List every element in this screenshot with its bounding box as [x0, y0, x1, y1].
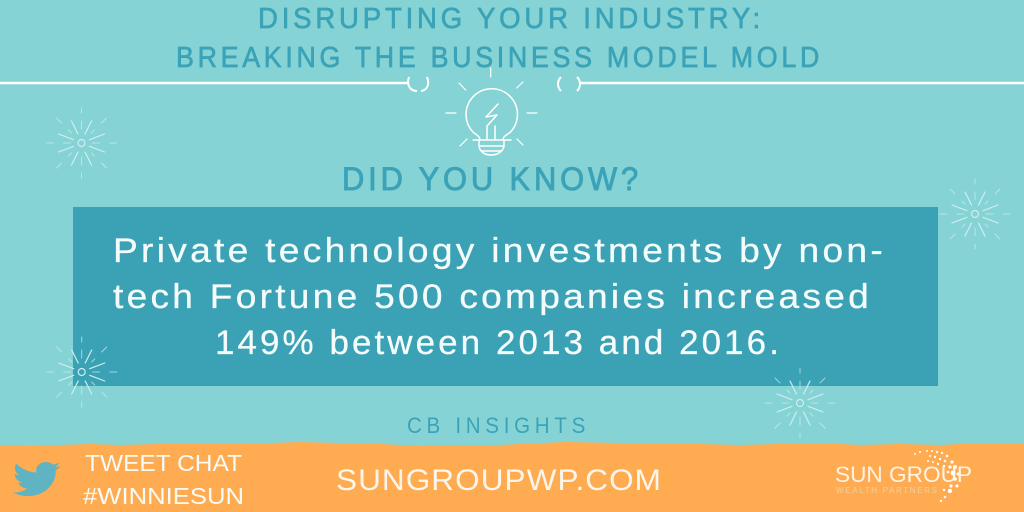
icon: starburst left upper — [46, 108, 116, 178]
tweet chat text: TWEET CHAT — [85, 450, 242, 476]
icon: twitter bird — [13, 462, 60, 496]
logo: Sun Group Wealth Partners: WEALTH PARTNERS — [836, 486, 937, 495]
website: SUNGROUPWP.COM — [336, 464, 662, 497]
logo dots — [914, 450, 960, 502]
statistic text — [113, 232, 886, 362]
tweet chat text: #WINNIESUN — [83, 483, 244, 509]
tweet chat text — [83, 450, 244, 509]
statistic text: tech Fortune 500 companies increased — [113, 278, 872, 316]
panel: statistic — [73, 207, 938, 386]
footer band — [0, 442, 1024, 512]
icon: light bulb — [446, 68, 537, 155]
title — [176, 3, 823, 74]
title: DISRUPTING YOUR INDUSTRY: — [258, 3, 764, 35]
divider with hooks — [0, 77, 1024, 91]
logo: Sun Group Wealth Partners: SUN GROUP — [835, 462, 972, 487]
source: CB Insights: CB INSIGHTS — [407, 413, 590, 438]
title: BREAKING THE BUSINESS MODEL MOLD — [176, 42, 823, 74]
statistic text: 149% between 2013 and 2016. — [215, 324, 782, 362]
icon: starburst bottom right — [765, 368, 835, 438]
logo: Sun Group Wealth Partners — [835, 450, 972, 502]
heading: did you know: DID YOU KNOW? — [342, 161, 642, 197]
icon: starburst left lower — [47, 337, 117, 407]
icon: starburst right — [940, 179, 1010, 249]
statistic text: Private technology investments by non- — [113, 232, 886, 270]
